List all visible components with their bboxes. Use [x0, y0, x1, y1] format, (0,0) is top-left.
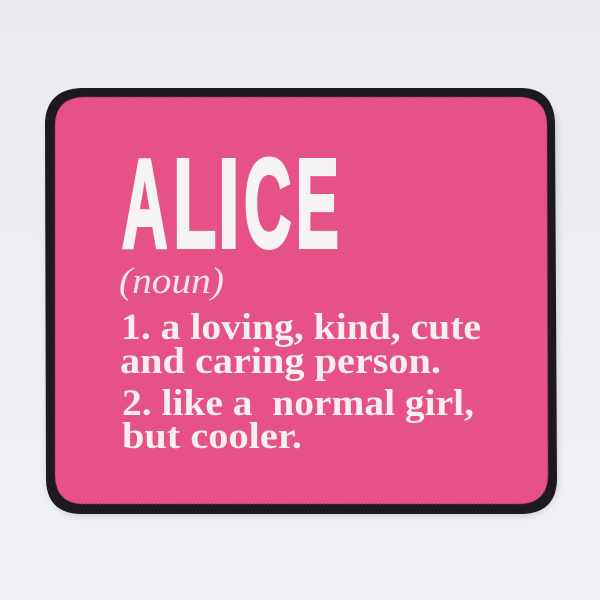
mat pink surface	[55, 97, 548, 504]
definition 1 line 1: 1. a loving, kind, cute	[121, 307, 481, 348]
definition 2 line 1: 2. like a normal girl,	[122, 383, 474, 424]
mouse mat	[45, 88, 557, 514]
definition 1 line 2: and caring person.	[120, 341, 441, 382]
title: ALICE: C	[244, 133, 291, 274]
definition 2 line 2: but cooler.	[122, 416, 302, 457]
definition text	[120, 307, 481, 457]
title: ALICE: I	[218, 133, 240, 274]
title: ALICE: L	[173, 133, 216, 274]
title: ALICE: A	[122, 133, 168, 274]
title: ALICE: E	[296, 133, 339, 274]
mat black stitched border	[45, 88, 557, 514]
mat shadow	[46, 92, 559, 517]
part of speech: noun: (noun)	[119, 261, 224, 302]
title: ALICE	[122, 133, 339, 274]
